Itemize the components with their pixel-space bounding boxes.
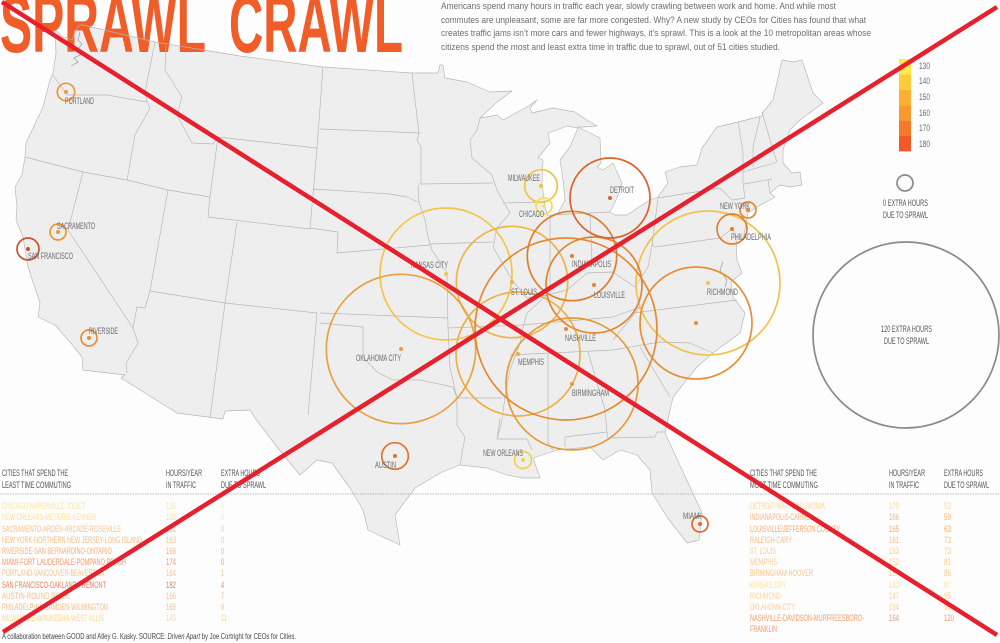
table rows: least time: NEW ORLEANS-METAIRIE-KENNER [2, 512, 96, 522]
city labels on the map: MIAMI [683, 511, 701, 521]
city labels on the map: ST. LOUIS [511, 287, 537, 297]
table header: least time: DUE TO SPRAWL [221, 480, 266, 490]
table rows: most time: 52 [944, 501, 951, 511]
table rows: least time: 0 [221, 501, 224, 511]
legend: 0 extra hours circle: DUE TO SPRAWL [883, 210, 928, 220]
table rows: least time: 163 [166, 535, 176, 545]
city labels on the map: SAN FRANCISCO [28, 251, 73, 261]
intro text: creates traffic jams isn’t more cars and fewer highways, it’s sprawl. This is a look at the 10 metropolitan areas whose [441, 28, 871, 39]
table rows: most time: RALEIGH-CARY [750, 535, 792, 545]
city labels on the map: OKLAHOMA CITY [356, 353, 401, 363]
table rows: least time: 138 [166, 512, 176, 522]
table rows: least time: NEW YORK-NORTHERN NEW JERSEY-LONG ISLAND [2, 535, 142, 545]
table header: least time: IN TRAFFIC [166, 480, 196, 490]
table rows: most time: 120 [944, 613, 954, 623]
legend: 120 extra hours circle [813, 242, 999, 428]
city labels on the map: LOUISVILLE [594, 290, 625, 300]
table rows: most time: 154 [889, 602, 899, 612]
table rows: most time: RICHMOND [750, 591, 781, 601]
table header: most time: CITIES THAT SPEND THE [750, 468, 817, 478]
city labels on the map: DETROIT [610, 185, 634, 195]
table rows: least time: 166 [166, 546, 176, 556]
table rows: least time: 164 [166, 568, 176, 578]
legend: hours per year colour scale: 170 [919, 123, 930, 133]
table rows: least time: 9 [221, 602, 224, 612]
table header: most time: MOST TIME COMMUTING [750, 480, 818, 490]
bubble: Milwaukee [525, 170, 557, 202]
table rows: most time: 179 [889, 501, 899, 511]
bubble: Richmond [636, 211, 780, 355]
table rows: most time: 86 [944, 568, 951, 578]
table rows: most time: 63 [944, 524, 951, 534]
table rows: least time: SAN FRANCISCO-OAKLAND-FREMONT [2, 580, 106, 590]
bubble: Birmingham [506, 318, 638, 450]
table rows: most time: 165 [889, 524, 899, 534]
table rows: most time: BIRMINGHAM-HOOVER [750, 568, 813, 578]
bubble: New York [740, 202, 756, 218]
table rows: most time: DETROIT-WARREN-LIVONIA [750, 501, 825, 511]
table rows: least time: MIAMI-FORT LAUDERDALE-POMPANO BEACH [2, 557, 126, 567]
table rows: most time: 95 [944, 591, 951, 601]
table header: least time: LEAST TIME COMMUTING [2, 480, 71, 490]
table header: least time: CITIES THAT SPEND THE [2, 468, 68, 478]
table rows: least time: 136 [166, 501, 176, 511]
table rows: most time: 81 [944, 557, 951, 567]
table rows: most time: 87 [944, 580, 951, 590]
intro text: citizens spend the most and least extra time in traffic due to sprawl, out of 51 cities studied. [441, 42, 780, 53]
bubble: New Orleans [514, 452, 532, 468]
city labels on the map: CHICAGO [519, 209, 544, 219]
intro text [441, 1, 871, 53]
table rows: most time: KANSAS CITY [750, 580, 786, 590]
legend: hours per year colour scale: 180 [919, 139, 930, 149]
table: cities that spend the most time commuting [750, 468, 989, 634]
legend: 0 extra hours circle [883, 175, 928, 220]
city labels on the map: MEMPHIS [518, 357, 544, 367]
legend: 0 extra hours circle: 0 EXTRA HOURS [883, 198, 928, 208]
table rows: least time: 174 [166, 557, 176, 567]
table rows: least time: 1 [221, 568, 224, 578]
bubble: Philadelphia [717, 214, 747, 244]
bubble: Sacramento [50, 224, 66, 240]
legend: hours per year colour scale: 140 [919, 76, 930, 86]
legend: hours per year colour scale: 150 [919, 92, 930, 102]
table rows: least time: 4 [221, 580, 224, 590]
table rows: least time: MILWAUKEE-WAUKESHA-WEST ALLIS [2, 613, 104, 623]
bubble: Kansas City [380, 208, 512, 340]
table rows: least time: AUSTIN-ROUND ROCK [2, 591, 69, 601]
table header: least time: EXTRA HOURS [221, 468, 260, 478]
table rows: most time: 153 [889, 546, 899, 556]
table rows: least time: PHILADELPHIA-CAMDEN-WILMINGTON [2, 602, 108, 612]
city labels on the map [28, 96, 771, 521]
table divider [0, 493, 1000, 495]
city labels on the map: NEW ORLEANS [483, 448, 523, 458]
bubble: Riverside [81, 330, 97, 346]
bubble: Memphis [456, 292, 580, 416]
bubble: Detroit [570, 158, 650, 238]
bubble: Nashville [475, 238, 657, 420]
city labels on the map: BIRMINGHAM [572, 388, 609, 398]
intro text: commutes are unpleasant, some are far more congested. Why? A new study by CEOs for Cities has found that what [441, 15, 866, 26]
table rows: least time: 166 [166, 591, 176, 601]
table header: least time: HOURS/YEAR [166, 468, 202, 478]
table rows: most time: 152 [889, 557, 899, 567]
table rows: most time: 166 [889, 512, 899, 522]
bubble: Portland [57, 83, 75, 101]
city labels on the map: INDIANAPOLIS [572, 259, 611, 269]
table rows: most time: MEMPHIS [750, 557, 777, 567]
map: state borders and coastline [15, 25, 823, 545]
city labels on the map: NEW YORK [720, 201, 750, 211]
city labels on the map: PHILADELPHIA [731, 232, 771, 242]
bubble: Indianapolis [527, 211, 617, 301]
table rows: least time: 0 [221, 546, 224, 556]
table rows: least time: 161 [166, 524, 176, 534]
table rows: most time: 73 [944, 546, 951, 556]
table rows: most time: 164 [889, 613, 899, 623]
table rows: most time: 73 [944, 535, 951, 545]
table header: most time [750, 468, 989, 490]
table rows: most time: NASHVILLE-DAVIDSON-MURFREESBORO- [750, 613, 864, 623]
bubble: Raleigh [640, 267, 752, 379]
bubble: St. Louis [456, 226, 568, 338]
table rows: least time: 7 [221, 591, 224, 601]
city labels on the map: KANSAS CITY [411, 260, 448, 270]
table rows: most time: INDIANAPOLIS-CARMEL [750, 512, 813, 522]
city labels on the map: AUSTIN [375, 460, 396, 470]
table rows: most time: 142 [889, 580, 899, 590]
table header: least time [2, 468, 266, 490]
table rows: least time: 11 [221, 613, 227, 623]
table rows: least time: CHICAGO-NAPERVILLE-JOLIET [2, 501, 85, 511]
table rows: most time: OKLAHOMA CITY [750, 602, 795, 612]
intro text: Americans spend many hours in traffic each year, slowly crawling between work and home. And while most [441, 1, 836, 12]
table rows: least time: SACRAMENTO-ARDEN-ARCADE-ROSEVILLE [2, 524, 121, 534]
bubbles: cities on the map [17, 83, 780, 532]
city labels on the map: SACRAMENTO [57, 221, 95, 231]
table rows: least time: RIVERSIDE-SAN BERNARDINO-ONTARIO [2, 546, 112, 556]
table rows: least time: 0 [221, 557, 224, 567]
table rows: most time: 157 [889, 568, 899, 578]
city labels on the map: MILWAUKEE [508, 173, 540, 183]
table rows: least time: 182 [166, 580, 176, 590]
table rows: most time: ST. LOUIS [750, 546, 776, 556]
table rows: most time: FRANKLIN [750, 624, 777, 634]
table header: most time: HOURS/YEAR [889, 468, 925, 478]
table rows: least time [2, 501, 227, 623]
bubble: Louisville [546, 237, 642, 333]
table rows: least time: 165 [166, 602, 176, 612]
city labels on the map: NASHVILLE [565, 333, 596, 343]
table rows: most time: 98 [944, 602, 951, 612]
bubble: San Francisco [17, 238, 39, 260]
city labels on the map: PORTLAND [65, 96, 94, 106]
table rows: least time: 145 [166, 613, 176, 623]
footer credit: A collaboration between GOOD and Atley G. Kasky. SOURCE: Driven Apart by Joe Cortright for CEOs for Cities. [2, 631, 296, 641]
legend: hours per year colour scale [899, 59, 930, 151]
table rows: least time: 0 [221, 535, 224, 545]
table rows: most time: 59 [944, 512, 951, 522]
table rows: least time: 0 [221, 524, 224, 534]
table: cities that spend the least time commuting [2, 468, 266, 623]
legend: hours per year colour scale: 160 [919, 108, 930, 118]
table rows: least time: PORTLAND-VANCOUVER-BEAVERTON [2, 568, 104, 578]
table header: most time: IN TRAFFIC [889, 480, 919, 490]
table rows: most time [750, 501, 954, 634]
legend: 120 extra hours circle: DUE TO SPRAWL [884, 336, 929, 346]
city labels on the map: RICHMOND [707, 287, 738, 297]
table rows: most time: LOUISVILLE/JEFFERSON COUNTY [750, 524, 840, 534]
table rows: most time: 161 [889, 535, 899, 545]
map: US land mass [15, 25, 823, 545]
legend: hours per year colour scale: 130 [919, 61, 930, 71]
table rows: most time: 147 [889, 591, 899, 601]
table rows: least time: 0 [221, 512, 224, 522]
bubble: Austin [382, 443, 408, 469]
city labels on the map: RIVERSIDE [89, 326, 118, 336]
bubble: Chicago [536, 198, 552, 214]
bubble: Oklahoma City [326, 274, 476, 424]
bubble: Miami [692, 516, 708, 532]
legend: 120 extra hours circle: 120 EXTRA HOURS [881, 324, 932, 334]
